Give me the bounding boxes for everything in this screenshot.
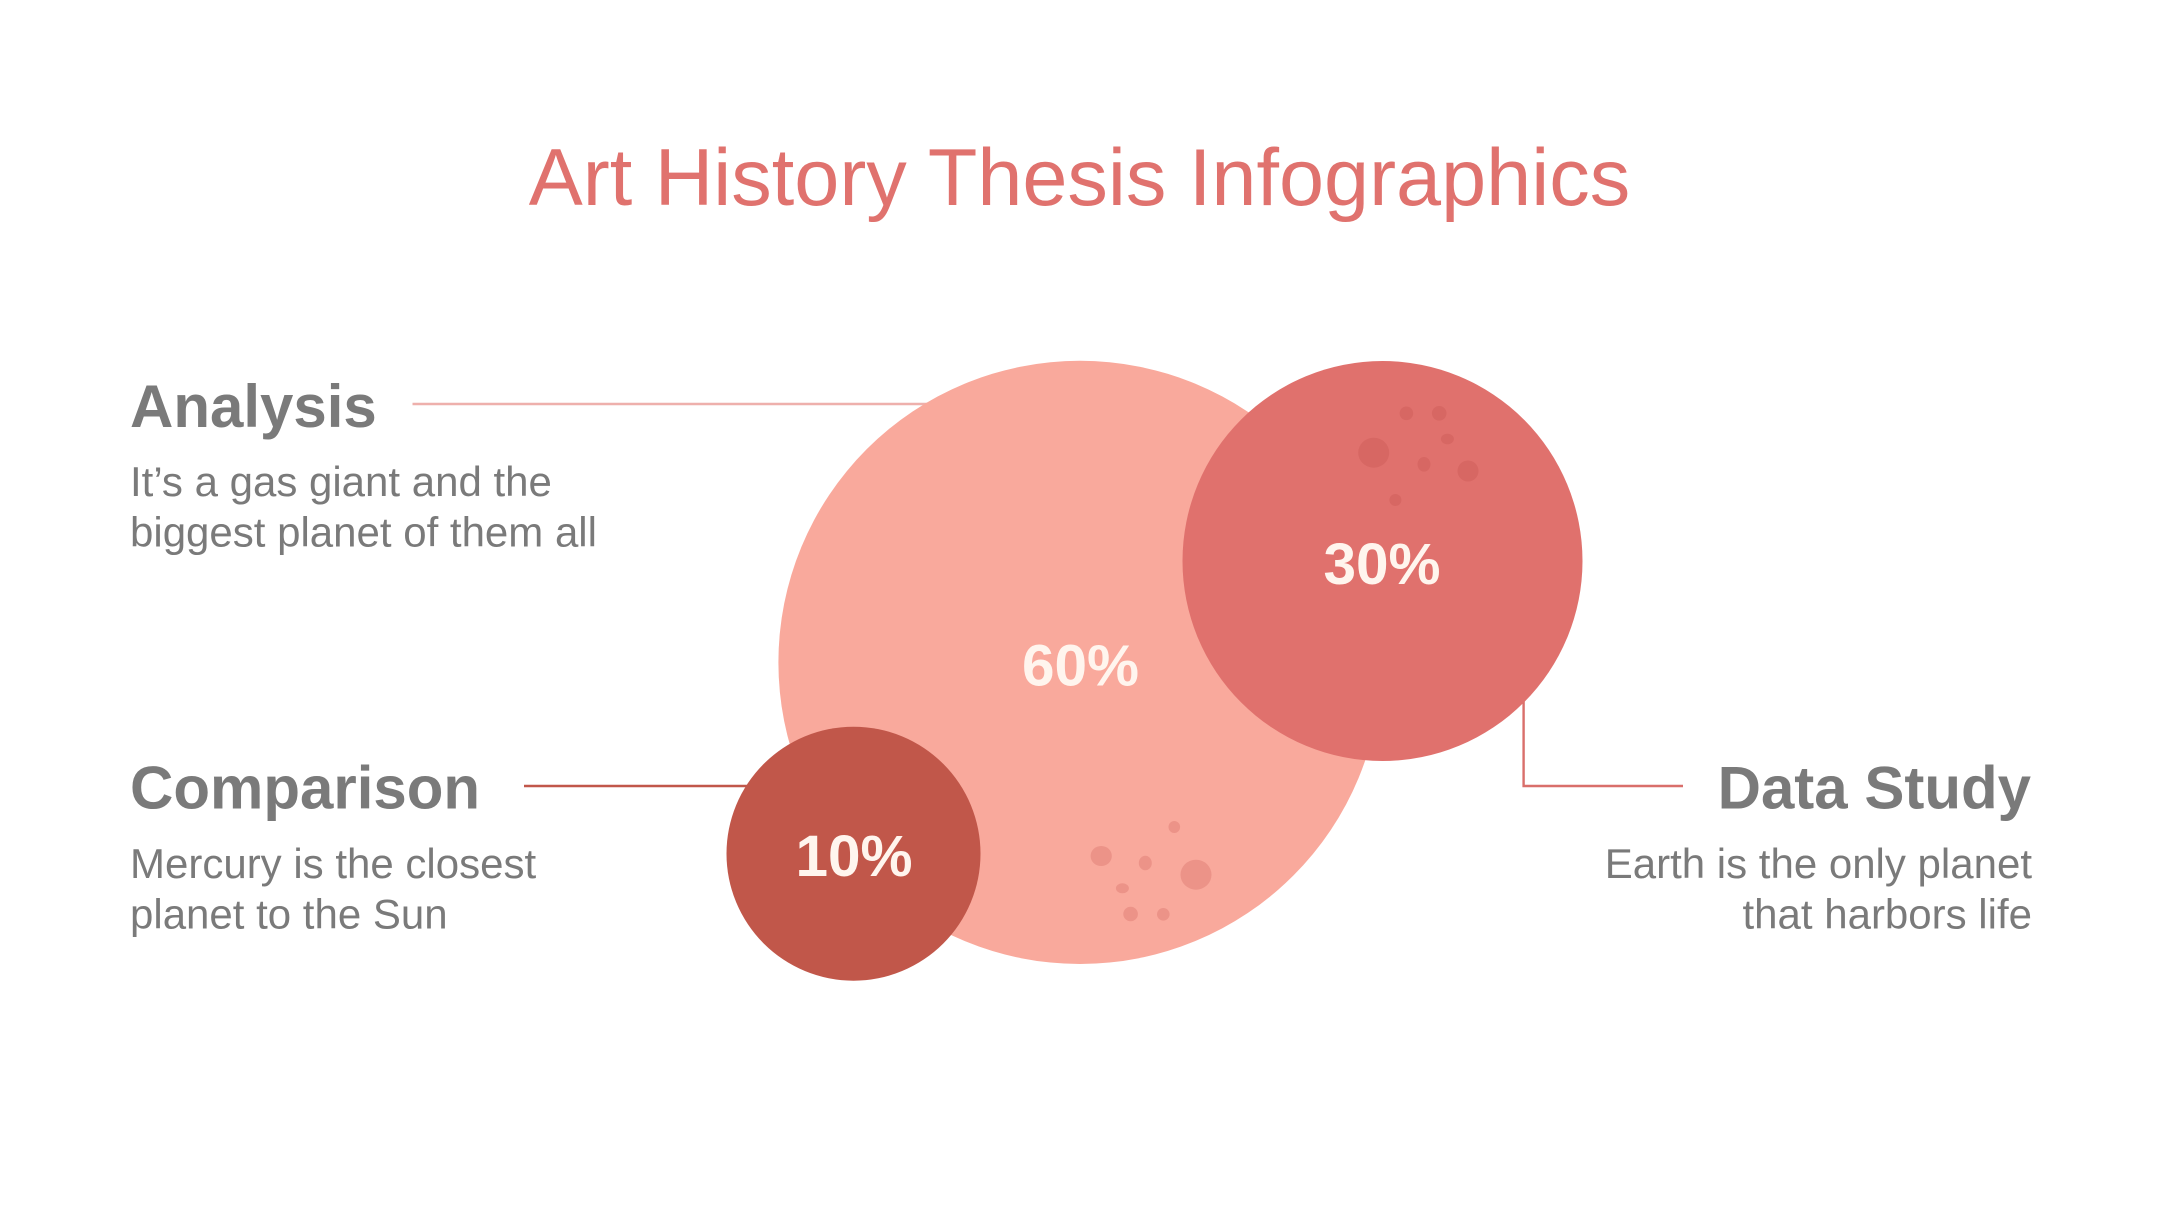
- craters: 60% circle: [1091, 821, 1212, 921]
- body: Comparison: Mercury is the closest: [130, 840, 536, 887]
- text block: Data Study: [1605, 754, 2032, 938]
- heading: Data Study: Data Study: [1718, 754, 2032, 822]
- body: Data Study: that harbors life: [1742, 890, 2032, 938]
- value: 30%: 30%: [1323, 532, 1441, 597]
- connector line: Data Study: [1524, 690, 1683, 786]
- circle: 10%: [726, 727, 980, 981]
- value: 60%: 60%: [1022, 634, 1139, 698]
- text block: Analysis: [130, 373, 597, 556]
- body: Analysis: It’s a gas giant and the: [130, 458, 552, 505]
- heading: Analysis: Analysis: [130, 373, 377, 440]
- title: Art History Thesis Infographics: [529, 133, 1630, 223]
- body: Data Study: Earth is the only planet: [1605, 840, 2032, 887]
- body: Analysis: biggest planet of them all: [130, 508, 597, 556]
- craters: 30% circle: [1358, 406, 1478, 506]
- body: Comparison: planet to the Sun: [130, 890, 448, 938]
- circle: 60%: [778, 361, 1382, 964]
- connector line: Comparison: [524, 785, 755, 787]
- value: 10%: 10%: [795, 824, 913, 889]
- circle: 30%: [1182, 361, 1582, 761]
- heading: Comparison: Comparison: [130, 754, 480, 822]
- connector line: Analysis: [412, 403, 945, 405]
- text block: Comparison: [130, 754, 536, 938]
